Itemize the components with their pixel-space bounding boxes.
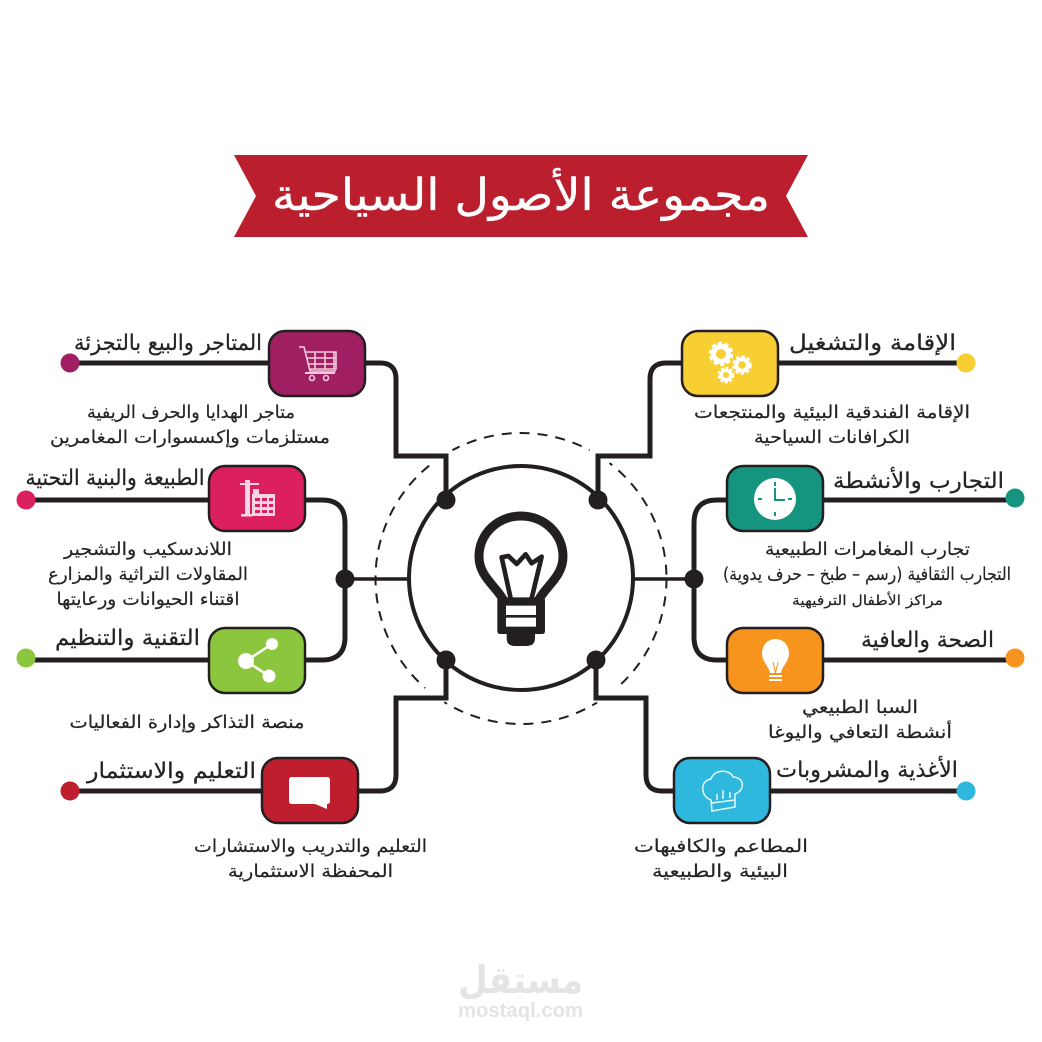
heading: المتاجر والبيع بالتجزئة [74,331,262,356]
junction dots [336,490,704,670]
icon: gears [710,344,750,382]
heading: الصحة والعافية [861,628,994,653]
connectors [26,363,1015,791]
description [48,540,248,610]
panel: technology [16,626,305,733]
panel: experiences [723,466,1024,609]
icon: speech bubble [289,777,330,809]
description: منصة التذاكر وإدارة الفعاليات [70,713,304,733]
heading: الأغذية والمشروبات [776,756,958,783]
panel: wellness [727,628,1024,743]
central circle [409,466,633,690]
heading: الطبيعة والبنية التحتية [26,466,204,491]
heading: التعليم والاستثمار [86,759,256,784]
description [723,540,1011,609]
description: مراكز الأطفال الترفيهية [792,591,943,609]
icon: chef hat [703,771,742,811]
icon: clock [754,478,796,520]
icon: light bulb [762,639,789,681]
description [634,837,808,882]
description: البيئية والطبيعية [652,862,788,882]
gaps in dashed circle [422,444,619,708]
icon: cart [299,347,336,380]
description: اقتناء الحيوانات ورعايتها [56,590,240,610]
watermark [458,958,583,1022]
description: اللاندسكيب والتشجير [63,540,232,560]
panel: education [60,758,427,882]
description: المطاعم والكافيهات [634,837,808,857]
heading: الإقامة والتشغيل [789,331,956,356]
icon: share [238,638,278,682]
description: التجارب الثقافية (رسم – طبخ – حرف يدوية) [723,565,1011,585]
description [768,698,952,743]
description [694,403,970,448]
description: الكرافانات السياحية [754,428,910,448]
panel: nature and infrastructure [16,466,305,610]
description [50,403,330,448]
description: السبا الطبيعي [802,698,918,718]
description: التعليم والتدريب والاستشارات [194,837,427,857]
description: مستلزمات وإكسسوارات المغامرين [50,428,330,448]
icon: crane and building [240,480,275,516]
title: مجموعة الأصول السياحية [272,167,770,221]
panel: retail [50,331,365,448]
icon: central light bulb [479,516,563,646]
description: متاجر الهدايا والحرف الريفية [87,403,295,423]
panel: accommodation [682,331,976,448]
description: الإقامة الفندقية البيئية والمنتجعات [694,403,970,423]
description [194,837,427,882]
panel: food [634,756,976,882]
heading: التجارب والأنشطة [833,467,1004,494]
watermark: mostaql.com [458,1000,583,1022]
watermark: مستقل [458,958,583,1002]
description: المقاولات التراثية والمزارع [48,565,248,585]
description: تجارب المغامرات الطبيعية [765,540,970,560]
description: المحفظة الاستثمارية [228,862,393,882]
title banner [234,155,808,237]
heading: التقنية والتنظيم [55,626,200,651]
description: أنشطة التعافي واليوغا [768,720,952,743]
dashed outer circle [376,433,666,724]
